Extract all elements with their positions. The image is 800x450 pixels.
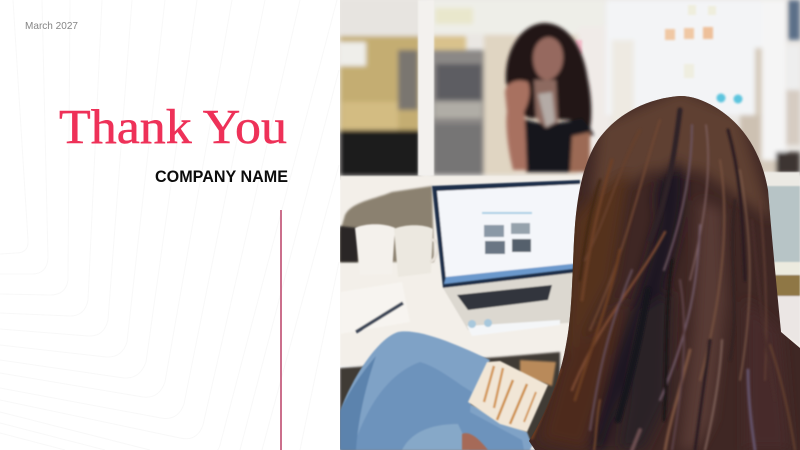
skin behind rip xyxy=(520,360,556,386)
dark bag strap xyxy=(340,226,358,262)
jeans leg xyxy=(340,331,534,450)
second laptop at right xyxy=(764,171,800,344)
blurred background scene xyxy=(340,0,800,176)
blurred woman in background xyxy=(505,23,594,172)
long brown hair xyxy=(520,90,800,450)
striped shirt xyxy=(530,444,535,450)
dark gap under desk xyxy=(340,352,560,450)
knee skin xyxy=(462,433,488,450)
office background wall xyxy=(340,0,800,180)
low-frequency colour areas xyxy=(540,90,790,450)
white desk xyxy=(340,176,800,366)
panel: left white background with contour lines xyxy=(0,0,339,450)
title: Thank You xyxy=(59,99,287,154)
coffee cups xyxy=(355,224,438,277)
company name: COMPANY NAME xyxy=(155,168,288,186)
hair strands xyxy=(532,110,795,450)
date label: March 2027 xyxy=(25,20,78,32)
white pillar xyxy=(418,0,434,176)
sticky notes xyxy=(575,5,742,104)
vertical accent line xyxy=(280,210,282,450)
bag on desk xyxy=(340,186,434,262)
ripped jeans with orange threads xyxy=(468,361,548,432)
notebook and pen xyxy=(354,301,404,334)
photo: office scene with woman at laptop xyxy=(340,0,800,450)
laptop xyxy=(432,180,580,336)
